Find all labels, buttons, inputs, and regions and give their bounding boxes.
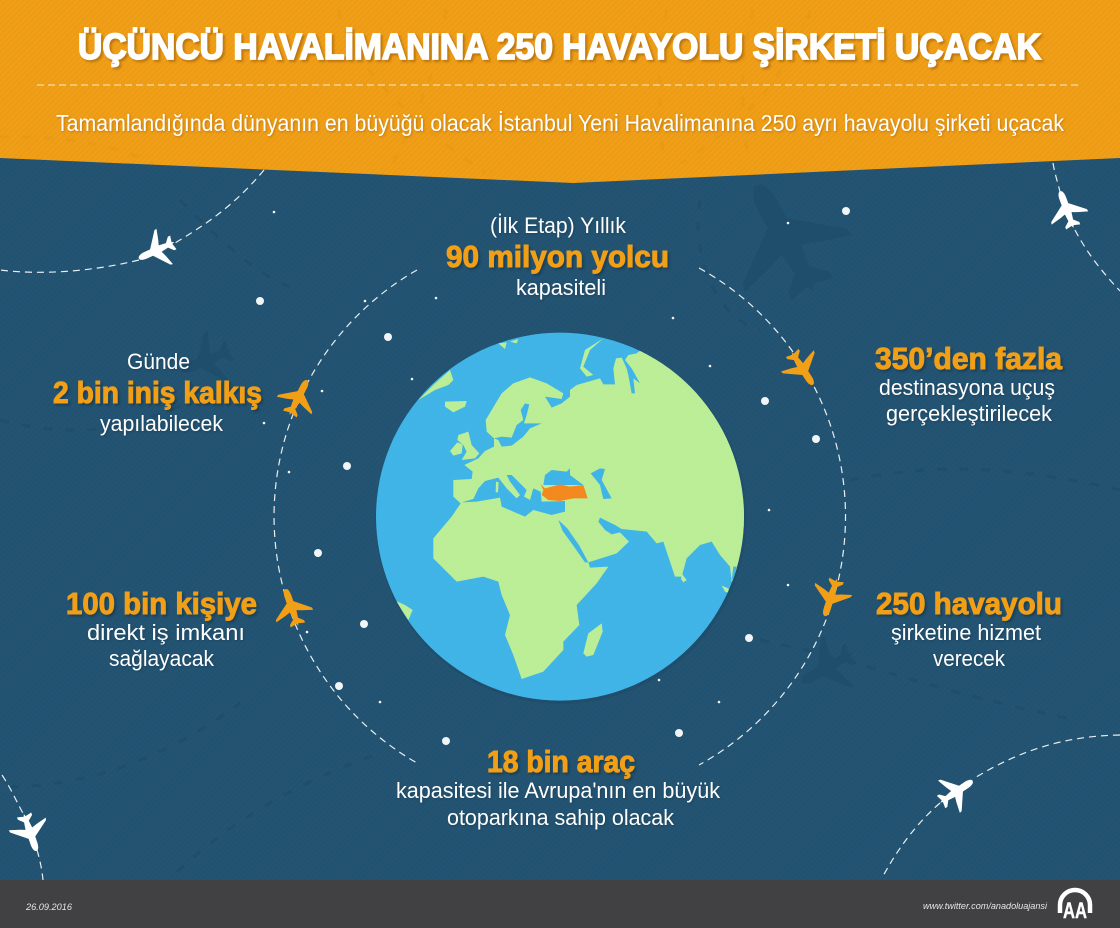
- text block: passenger capacity: kapasiteli: [516, 275, 606, 300]
- icon: orange plane upper left: [272, 371, 324, 424]
- seas: [462, 403, 737, 580]
- icon: shadow plane left: [171, 324, 242, 396]
- footer date: 26.09.2016: [25, 902, 72, 912]
- icon: orange plane upper right: [775, 341, 829, 395]
- icon: agency logo: [1060, 890, 1090, 923]
- icon: shadow plane right: [787, 627, 867, 707]
- text block: airlines: 250 havayolu: [876, 586, 1062, 621]
- text block: passenger capacity: (İlk Etap) Yıllık: [490, 213, 627, 238]
- text block: destinations: destinasyona uçuş: [879, 375, 1055, 400]
- icon: white plane bottom left: [5, 808, 55, 857]
- header divider: [37, 84, 1081, 86]
- text block: parking: otoparkına sahip olacak: [447, 805, 675, 830]
- text block: airlines: şirketine hizmet: [891, 620, 1041, 645]
- islands: [396, 338, 730, 657]
- text block: parking: 18 bin araç: [487, 744, 635, 779]
- title: ÜÇÜNCÜ HAVALİMANINA 250 HAVAYOLU ŞİRKETİ UÇACAK: [78, 26, 1041, 67]
- text block: parking: [396, 744, 721, 830]
- text block: daily landings: yapılabilecek: [100, 411, 224, 436]
- background faint flight paths: [0, 200, 1120, 872]
- text block: airlines: verecek: [933, 646, 1006, 671]
- text block: destinations: 350’den fazla: [875, 341, 1063, 376]
- text block: passenger capacity: [446, 213, 669, 300]
- orbit: dashed circle arcs: [274, 268, 846, 765]
- text block: destinations: gerçekleştirilecek: [886, 401, 1053, 426]
- icon: shadow plane top right: [704, 157, 867, 320]
- text block: passenger capacity: 90 milyon yolcu: [446, 239, 669, 274]
- text block: airlines: [876, 586, 1062, 671]
- icon: orange plane lower right: [806, 573, 855, 622]
- icon: orange plane lower left: [267, 583, 317, 632]
- stars: dots: [256, 207, 850, 745]
- text block: daily landings: 2 bin iniş kalkış: [53, 375, 262, 410]
- highlight: Turkey: [541, 484, 588, 501]
- icon: white plane bottom right: [929, 765, 983, 819]
- text block: jobs: [66, 586, 257, 671]
- corner flight paths: [0, 163, 1120, 880]
- text block: destinations: [875, 341, 1063, 426]
- text block: daily landings: [53, 349, 262, 436]
- land masses: Eurasia and Africa: [433, 345, 770, 679]
- panel: footer bar: [0, 880, 1120, 928]
- text block: daily landings: Günde: [127, 349, 190, 374]
- text block: jobs: direkt iş imkanı: [87, 620, 245, 645]
- panel: orange header banner: [0, 0, 1120, 183]
- footer url: www.twitter.com/anadoluajansi: [923, 901, 1048, 912]
- text block: parking: kapasitesi ile Avrupa'nın en büyük: [396, 778, 721, 803]
- text block: jobs: sağlayacak: [109, 646, 215, 671]
- globe: [376, 332, 744, 701]
- icon: white plane top left: [131, 224, 182, 276]
- text block: jobs: 100 bin kişiye: [66, 586, 257, 621]
- icon: agency logo: AA: [1063, 898, 1087, 923]
- icon: white plane top right: [1042, 185, 1092, 235]
